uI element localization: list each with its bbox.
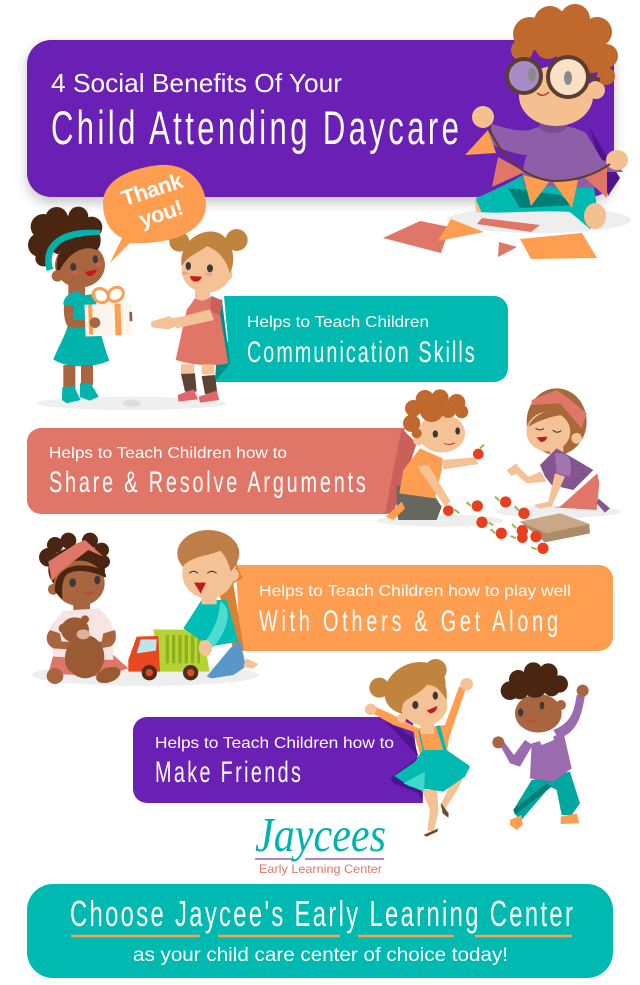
text: call to action subline: as your child care center of choice today!	[133, 945, 508, 966]
text: thank: Thank	[118, 168, 187, 211]
text: play intro: Helps to Teach Children how to play well	[259, 583, 571, 600]
logo: Jaycees	[255, 807, 386, 876]
illustration: boy with bunting	[383, 4, 631, 259]
heading: subtitle: 4 Social Benefits Of Your	[51, 68, 342, 98]
illustration: children playing with truck	[32, 530, 258, 686]
heading: with others: With Others & Get Along	[259, 605, 558, 638]
text: communication intro: Helps to Teach Children	[247, 314, 429, 331]
panel: communication skills	[215, 296, 508, 382]
heading: communication skills: Communication Skills	[247, 336, 475, 369]
panel: call to action	[27, 884, 613, 978]
callout: thank you bubble	[103, 165, 206, 263]
illustration: children sharing apples	[377, 388, 622, 554]
text: you: you!	[136, 195, 186, 232]
panel: make friends	[133, 717, 423, 803]
heading: make friends: Make Friends	[155, 756, 301, 789]
logo tagline: Early Learning Center	[259, 862, 382, 876]
illustration: children dancing	[365, 652, 589, 837]
text: friends intro: Helps to Teach Children how to	[155, 735, 394, 752]
panel: share and resolve arguments	[27, 428, 405, 514]
text: sharing intro: Helps to Teach Children how to	[49, 445, 287, 462]
heading: call to action: Choose Jaycee's Early Learning Center	[70, 894, 573, 934]
heading: share and resolve: Share & Resolve Arguments	[49, 466, 366, 499]
heading: main title: Child Attending Daycare	[51, 103, 459, 155]
logo wordmark: Jaycees	[255, 807, 386, 862]
panel: play well with others	[236, 565, 613, 651]
panel: header	[27, 40, 614, 203]
illustration: gift giving girls	[28, 207, 248, 410]
